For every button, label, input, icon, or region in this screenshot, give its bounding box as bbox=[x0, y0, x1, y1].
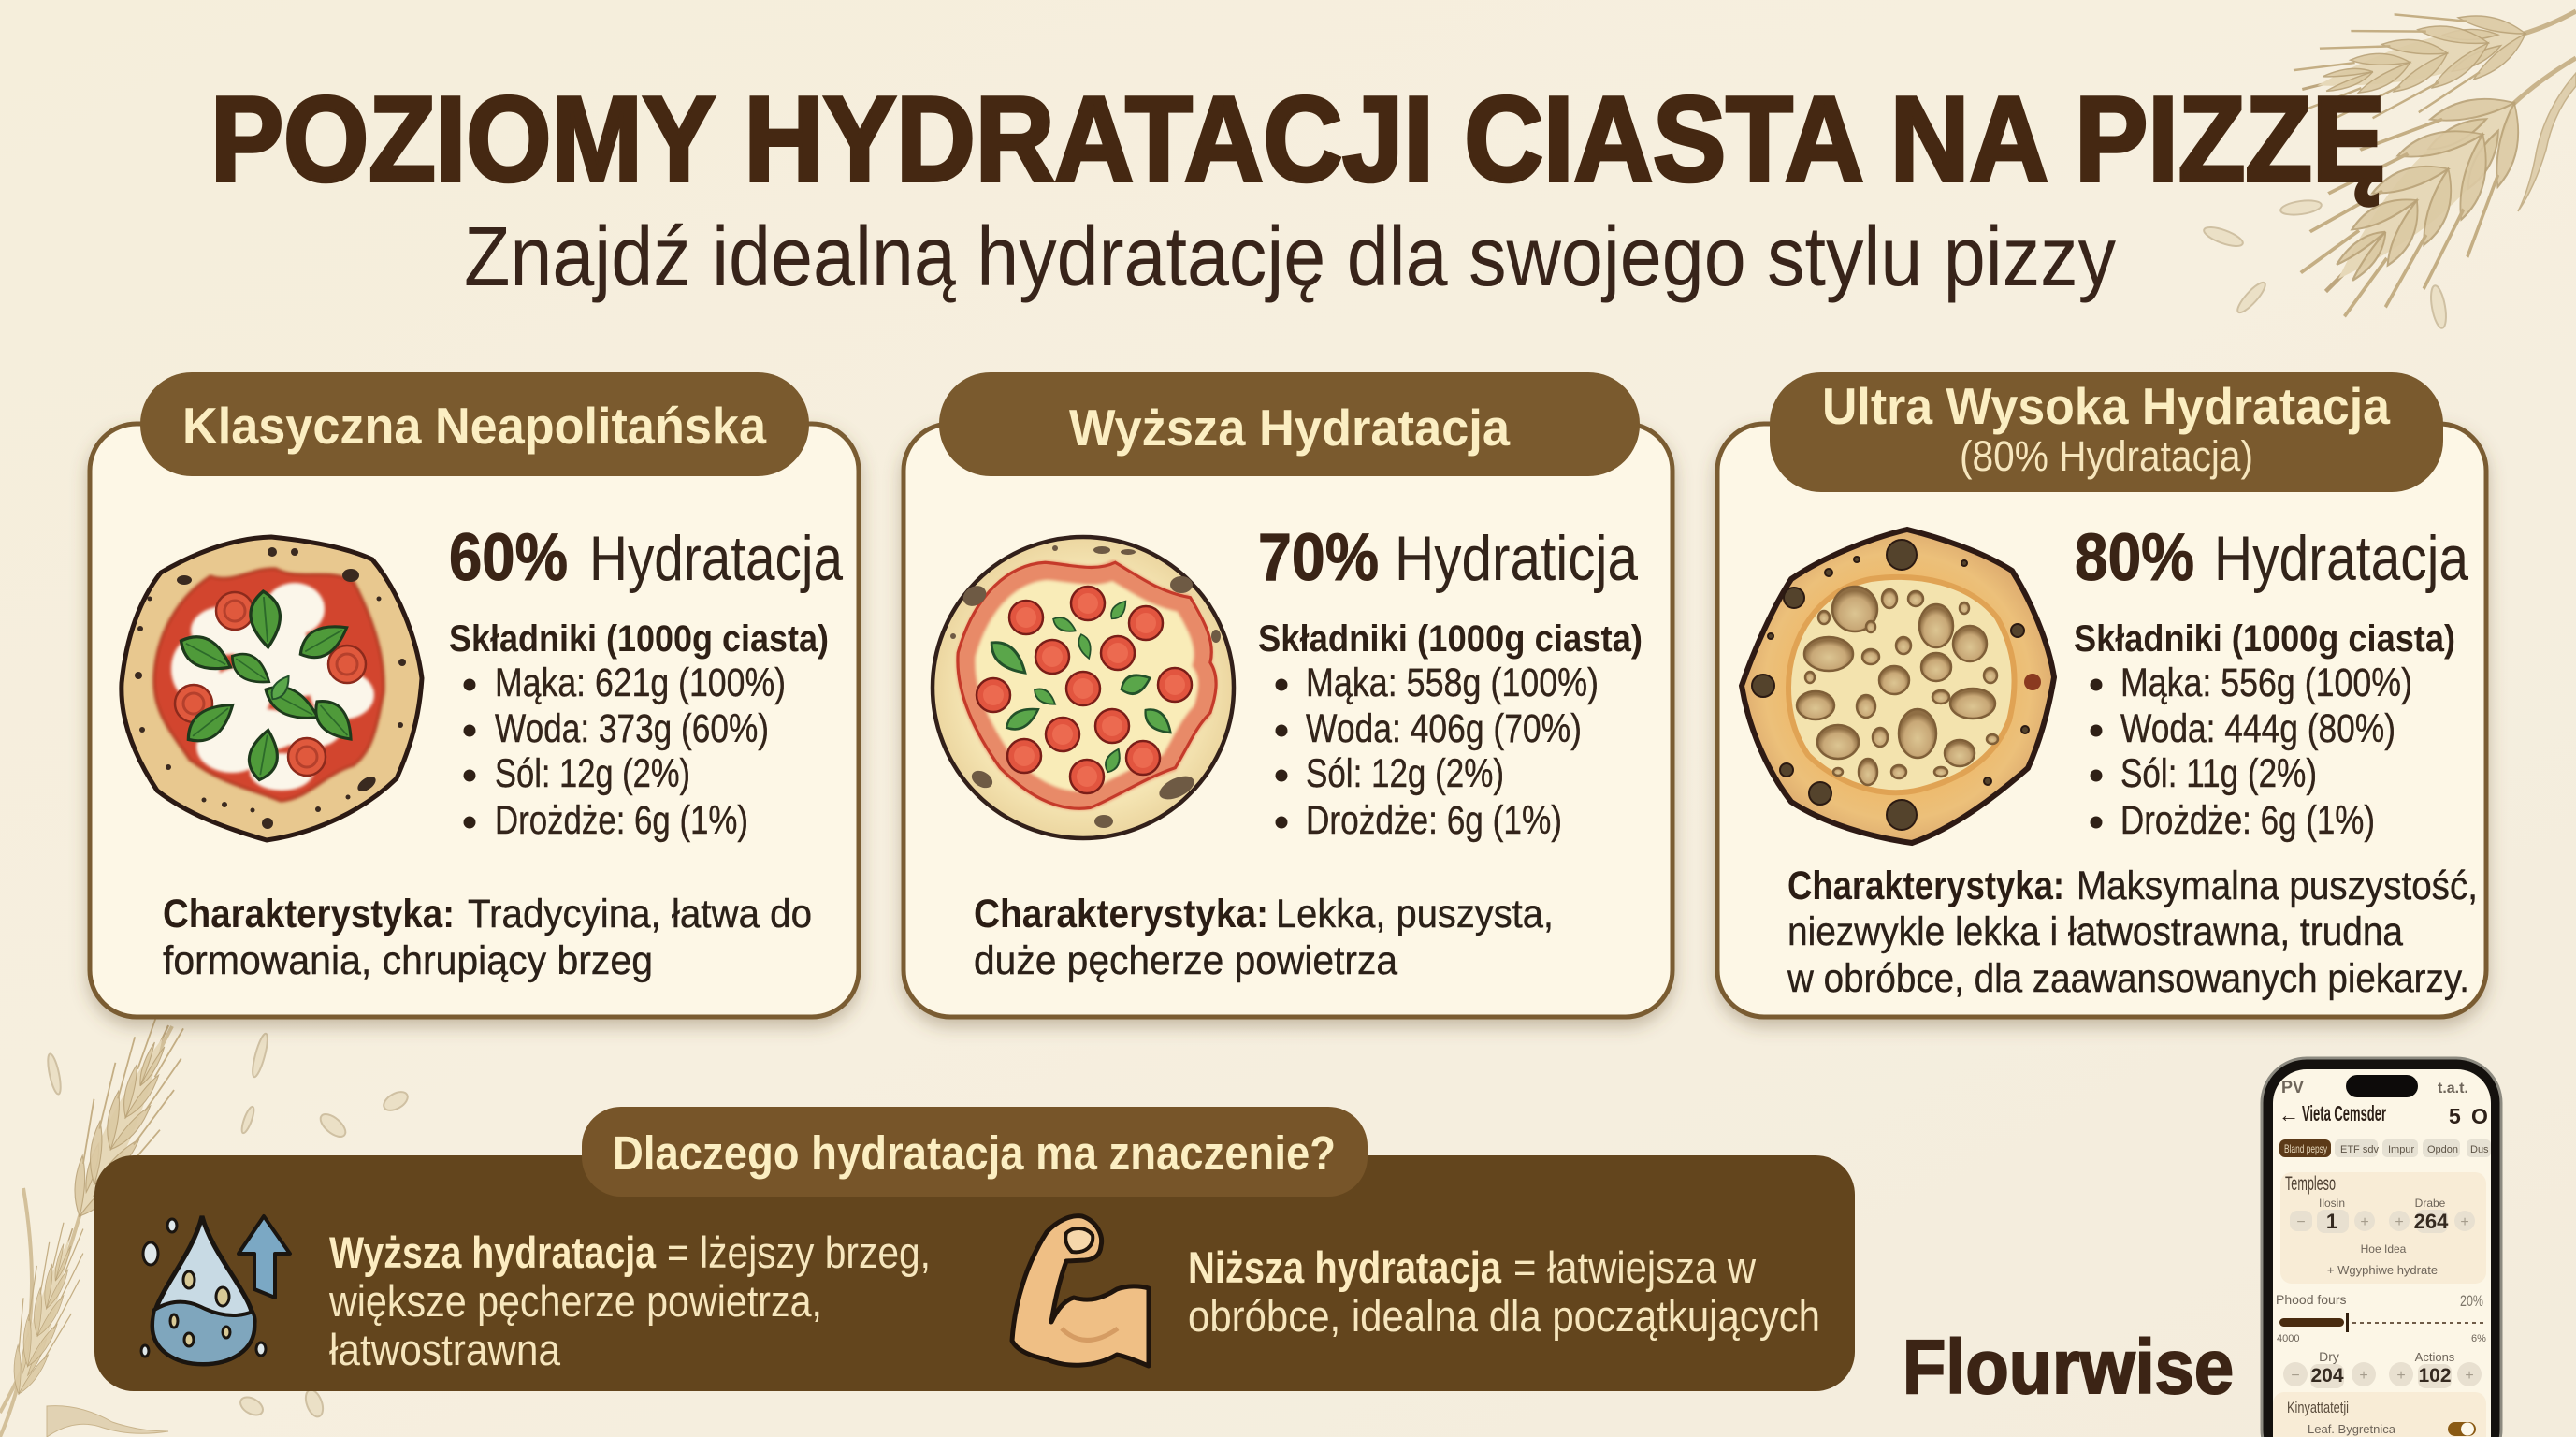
hydration value: 70%: Hydraticja bbox=[1395, 523, 1638, 594]
stepper row bbox=[2283, 1349, 2482, 1388]
ingredients list bbox=[1258, 618, 1643, 843]
hydration slider: 6% bbox=[2471, 1333, 2486, 1344]
header pill: Wyższa Hydratacja: Wyższa Hydratacja bbox=[1069, 399, 1510, 457]
hydration value: 70% bbox=[1258, 521, 1638, 595]
template card: − bbox=[2296, 1214, 2306, 1230]
tabs: Bland pepsy bbox=[2284, 1142, 2327, 1155]
ingredients list: Woda: 406g (70%) bbox=[1306, 706, 1582, 751]
tabs: Impur bbox=[2388, 1144, 2414, 1155]
characteristics text: formowania, chrupiący brzeg bbox=[163, 938, 653, 983]
ingredients list: Woda: 373g (60%) bbox=[495, 706, 769, 751]
tabs: Dus bbox=[2470, 1144, 2489, 1155]
app header: ← bbox=[2279, 1103, 2299, 1126]
characteristics text bbox=[974, 892, 1554, 983]
ingredients list: Sól: 11g (2%) bbox=[2120, 751, 2317, 796]
characteristics text: niezwykle lekka i łatwostrawna, trudna bbox=[1787, 909, 2403, 954]
hydration slider: Phood fours bbox=[2276, 1292, 2346, 1307]
phone mockup bbox=[2262, 1058, 2501, 1437]
ingredients list: Woda: 444g (80%) bbox=[2120, 706, 2395, 751]
template card: Templeso bbox=[2285, 1173, 2336, 1195]
stepper row: + bbox=[2396, 1368, 2406, 1384]
hydration value: 80%: Hydratacja bbox=[2214, 523, 2468, 594]
status bar: t.a.t. bbox=[2438, 1081, 2468, 1096]
template card: + bbox=[2360, 1214, 2369, 1230]
toggle card: Kinyattatetji bbox=[2287, 1399, 2349, 1416]
stepper row: Dry bbox=[2319, 1349, 2339, 1364]
ingredients list: Sól: 12g (2%) bbox=[495, 751, 690, 796]
text: higher hydration: łatwostrawna bbox=[329, 1325, 561, 1374]
template card bbox=[2280, 1172, 2486, 1284]
panel: higher hydration 70% bbox=[904, 372, 1672, 1017]
ingredients list: Składniki (1000g ciasta) bbox=[2074, 618, 2455, 660]
characteristics text: Tradycyina, łatwa do bbox=[468, 892, 812, 936]
status bar: PV bbox=[2281, 1078, 2304, 1096]
ingredients list: Składniki (1000g ciasta) bbox=[449, 618, 829, 660]
characteristics text: Charakterystyka: bbox=[163, 892, 455, 936]
stepper row: 102 bbox=[2418, 1365, 2452, 1386]
toggle card: Leaf. Bygretnica bbox=[2308, 1422, 2396, 1436]
header pill: Ultra Wysoka Hydratacja: (80% Hydratacja) bbox=[1960, 432, 2253, 480]
ingredients list: Mąka: 558g (100%) bbox=[1306, 660, 1599, 705]
ingredients list: Składniki (1000g ciasta) bbox=[1258, 618, 1643, 660]
text: lower hydration: Niższa hydratacja bbox=[1188, 1242, 1502, 1292]
brand: Flourwise: Flourwise bbox=[1903, 1325, 2234, 1410]
hydration slider: 20% bbox=[2460, 1292, 2483, 1310]
illustration: pepperoni pizza bbox=[933, 537, 1234, 838]
panel: classic Neapolitan 60% bbox=[90, 372, 859, 1017]
hydration slider bbox=[2276, 1292, 2486, 1344]
stepper row: − bbox=[2291, 1368, 2300, 1384]
characteristics text bbox=[163, 892, 812, 983]
characteristics text bbox=[1787, 864, 2478, 1001]
ingredients list bbox=[449, 618, 829, 843]
hydration value: 80%: 80% bbox=[2075, 521, 2194, 595]
toggle card bbox=[2273, 1392, 2486, 1437]
characteristics text: Maksymalna puszystość, bbox=[2077, 864, 2478, 908]
wheat decoration bottom left bbox=[0, 1007, 411, 1437]
text: higher hydration: Wyższa hydratacja bbox=[329, 1227, 657, 1277]
header pill: Klasyczna Neapolitańska: Klasyczna Neapolitańska bbox=[182, 397, 766, 455]
template card: + bbox=[2395, 1214, 2404, 1230]
status bar bbox=[2281, 1078, 2468, 1096]
stepper row: 204 bbox=[2310, 1365, 2344, 1386]
app header bbox=[2279, 1101, 2488, 1128]
template card: + Wgyphiwe hydrate bbox=[2327, 1263, 2438, 1277]
heading pill: Dlaczego hydratacja ma znaczenie? bbox=[582, 1107, 1368, 1197]
panel: why hydration matters bbox=[94, 1107, 1855, 1391]
subtitle: Znajdź idealną hydratację dla swojego stylu pizzy bbox=[464, 210, 2116, 304]
template card: 1 bbox=[2326, 1210, 2337, 1233]
template card: Ilosin bbox=[2319, 1197, 2345, 1210]
app header: O bbox=[2471, 1104, 2488, 1128]
hydration value: 60%: Hydratacja bbox=[589, 523, 843, 594]
panel: ultra high hydration 80% bbox=[1717, 372, 2486, 1017]
text: lower hydration: = łatwiejsza w bbox=[1513, 1242, 1757, 1292]
text: higher hydration: większe pęcherze powietrza, bbox=[328, 1276, 822, 1326]
characteristics text: Lekka, puszysta, bbox=[1276, 892, 1554, 936]
app header: Vieta Cemsder bbox=[2302, 1101, 2386, 1125]
ingredients list: Drożdże: 6g (1%) bbox=[2120, 798, 2375, 843]
header pill: Ultra Wysoka Hydratacja: Ultra Wysoka Hydratacja bbox=[1822, 377, 2390, 435]
characteristics text: w obróbce, dla zaawansowanych piekarzy. bbox=[1787, 956, 2469, 1001]
stepper row: Actions bbox=[2415, 1350, 2455, 1364]
header pill: Ultra Wysoka Hydratacja bbox=[1770, 372, 2443, 492]
tabs bbox=[2279, 1139, 2491, 1157]
characteristics text: Charakterystyka: bbox=[1787, 864, 2064, 908]
stepper row: + bbox=[2465, 1368, 2474, 1384]
illustration: margherita pizza bbox=[122, 537, 422, 840]
illustration: airy crust pizza bbox=[1742, 530, 2054, 843]
title: POZIOMY HYDRATACJI CIASTA NA PIZZĘ bbox=[210, 72, 2385, 207]
header pill: Klasyczna Neapolitańska bbox=[140, 372, 809, 476]
template card: Drabe bbox=[2415, 1197, 2446, 1210]
ingredients list bbox=[2074, 618, 2455, 843]
ingredients list: Mąka: 621g (100%) bbox=[495, 660, 786, 705]
template card: Hoe Idea bbox=[2361, 1242, 2407, 1256]
hydration value: 70%: 70% bbox=[1258, 521, 1379, 595]
ingredients list: Sól: 12g (2%) bbox=[1306, 751, 1504, 796]
hydration value: 60%: 60% bbox=[449, 521, 568, 595]
icon: water drop with bubbles and up arrow bbox=[141, 1216, 290, 1364]
text: higher hydration bbox=[328, 1227, 931, 1374]
tabs: Opdon bbox=[2427, 1144, 2458, 1155]
template card: 264 bbox=[2414, 1210, 2449, 1233]
app header: 5 bbox=[2449, 1104, 2461, 1128]
hydration slider: 4000 bbox=[2277, 1333, 2299, 1344]
ingredients list: Drożdże: 6g (1%) bbox=[1306, 798, 1562, 843]
template card: + bbox=[2460, 1214, 2469, 1230]
text: lower hydration bbox=[1188, 1242, 1820, 1341]
ingredients list: Drożdże: 6g (1%) bbox=[495, 798, 748, 843]
characteristics text: duże pęcherze powietrza bbox=[974, 938, 1397, 983]
header pill: Wyższa Hydratacja bbox=[939, 372, 1640, 476]
hydration value: 80% bbox=[2075, 521, 2468, 595]
heading pill: Dlaczego hydratacja ma znaczenie?: Dlaczego hydratacja ma znaczenie? bbox=[613, 1126, 1336, 1180]
ingredients list: Mąka: 556g (100%) bbox=[2120, 660, 2412, 705]
wheat decoration top right bbox=[2202, 0, 2576, 348]
text: higher hydration: = lżejszy brzeg, bbox=[667, 1227, 931, 1277]
hydration value: 60% bbox=[449, 521, 843, 595]
icon: flexed arm bbox=[1012, 1216, 1149, 1366]
characteristics text: Charakterystyka: bbox=[974, 892, 1268, 936]
stepper row: + bbox=[2359, 1368, 2368, 1384]
text: lower hydration: obróbce, idealna dla początkujących bbox=[1188, 1291, 1820, 1341]
tabs: ETF sdv bbox=[2340, 1144, 2379, 1155]
